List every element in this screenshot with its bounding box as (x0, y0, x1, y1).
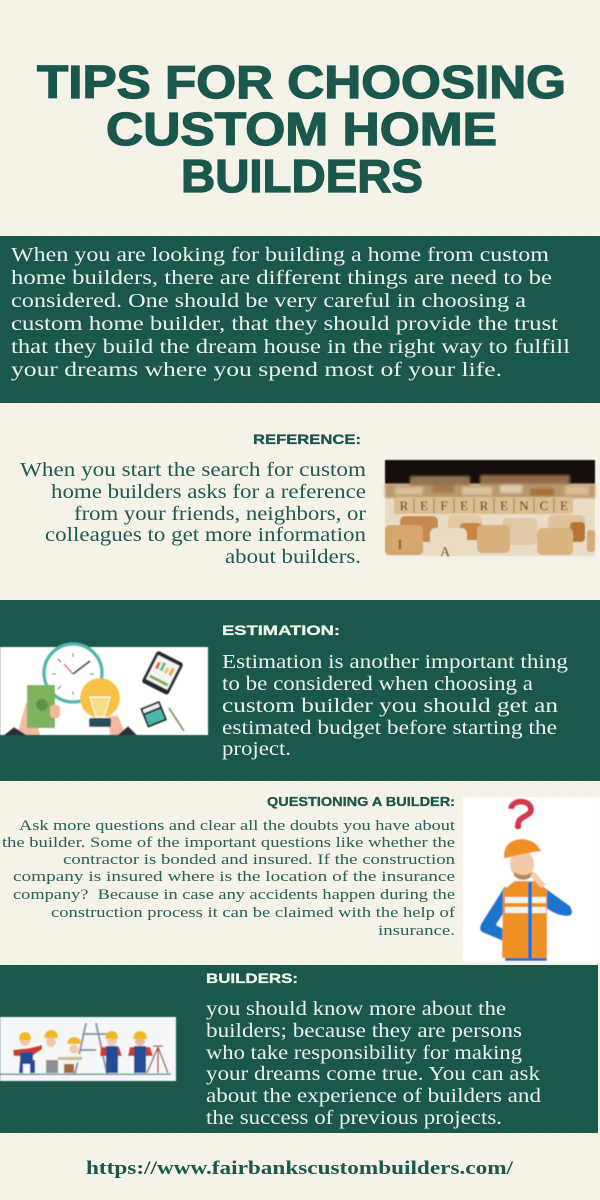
worker 2 (42, 1030, 60, 1073)
intro paragraph (11, 244, 570, 381)
icon: question mark (511, 802, 531, 824)
dice row: REFERENCE: R (400, 498, 409, 513)
intro paragraph: your dreams where you spend most of your life. (11, 359, 502, 381)
title (37, 56, 566, 202)
builders paragraph: you should know more about the (206, 998, 506, 1020)
image: team of builders (0, 1017, 176, 1081)
section: questioning a builder (2, 794, 600, 962)
worker 5 (128, 1031, 153, 1073)
estimation paragraph: Estimation is another important thing (222, 651, 568, 673)
questioning paragraph: contractor is bonded and insured. If the construction (63, 852, 456, 868)
reference paragraph: from your friends, neighbors, or (74, 504, 367, 525)
builders paragraph: about the experience of builders and (206, 1085, 541, 1107)
intro paragraph: home builders, there are different things are need to be (11, 267, 552, 289)
estimation paragraph: to be considered when choosing a (222, 673, 533, 695)
builders paragraph: who take responsibility for making (206, 1042, 522, 1064)
icon: money in hand (4, 685, 60, 735)
icon: red dot of question mark (514, 822, 522, 830)
icon: tablet chart (141, 650, 184, 696)
reference paragraph: When you start the search for custom (20, 460, 366, 481)
questioning paragraph: company is insured where is the location of the insurance (13, 869, 455, 885)
foreground dice: A (440, 545, 451, 560)
estimation paragraph: estimated budget before starting the (222, 717, 557, 739)
dice row: REFERENCE: C (540, 498, 548, 513)
estimation paragraph (222, 651, 568, 760)
builders paragraph: the success of previous projects. (206, 1107, 502, 1129)
dice row: REFERENCE: F (440, 498, 448, 513)
heading: questioning a builder: QUESTIONING A BUILDER: (267, 794, 455, 809)
panel: estimation (0, 600, 600, 781)
panel: introduction (0, 236, 600, 403)
heading: reference: REFERENCE: (253, 431, 361, 447)
dice row: REFERENCE: N (519, 498, 529, 513)
reference paragraph (20, 460, 367, 568)
questioning paragraph: company? Because in case any accidents happen during the (13, 887, 455, 903)
estimation paragraph: custom builder you should get an (222, 695, 558, 717)
worker figure (480, 839, 572, 961)
reference paragraph: home builders asks for a reference (51, 482, 366, 503)
worker 1 (13, 1032, 42, 1073)
intro paragraph: considered. One should be very careful in choosing a (11, 290, 526, 312)
reference paragraph: colleagues to get more information (45, 525, 366, 546)
image: reference letter dice (385, 460, 595, 560)
builders paragraph: builders; because they are persons (206, 1020, 522, 1042)
ground line (0, 1074, 171, 1075)
title: BUILDERS (181, 150, 423, 202)
heading: estimation: ESTIMATION: (222, 622, 340, 638)
dice row: REFERENCE: R (480, 498, 489, 513)
estimation paragraph: project. (222, 738, 291, 760)
builders paragraph (206, 998, 541, 1129)
questioning paragraph: the builder. Some of the important questions like whether the (2, 835, 455, 851)
dice row: REFERENCE (394, 497, 573, 514)
intro paragraph: custom home builder, that they should provide the trust (11, 313, 558, 335)
foreground dice (385, 515, 595, 560)
questioning paragraph: insurance. (378, 923, 455, 939)
intro paragraph: When you are looking for building a home from custom (11, 244, 549, 266)
questioning paragraph (2, 818, 456, 939)
questioning paragraph: Ask more questions and clear all the doubts you have about (19, 818, 455, 834)
panel: builders (0, 965, 598, 1133)
worker 4 (100, 1031, 122, 1073)
dice row: REFERENCE: E (460, 498, 468, 513)
image: budget illustration (0, 644, 208, 735)
dice row: REFERENCE: E (560, 498, 568, 513)
questioning paragraph: construction process it can be claimed with the help of (51, 905, 455, 921)
icon: pencil (169, 708, 184, 731)
reference paragraph: about builders. (225, 547, 361, 568)
title: CUSTOM HOME (106, 103, 497, 155)
dice row: REFERENCE: E (420, 498, 428, 513)
foreground dice: I (398, 538, 403, 553)
intro paragraph: that they build the dream house in the right way to fulfill (11, 336, 570, 358)
section: reference (20, 431, 595, 568)
icon: calculator (140, 701, 167, 728)
ladder (75, 1023, 107, 1074)
footer url: https://www.fairbankscustombuilders.com/ (86, 1158, 514, 1179)
builders paragraph: your dreams come true. You can ask (206, 1063, 540, 1085)
surveying tripod (147, 1046, 168, 1073)
dice row: REFERENCE: E (500, 498, 508, 513)
worker 3 (58, 1037, 84, 1073)
heading: builders: BUILDERS: (206, 970, 298, 986)
icon: clock (44, 644, 102, 702)
image: thinking worker (463, 797, 600, 962)
title: TIPS FOR CHOOSING (37, 56, 566, 108)
icon: light bulb in hand (80, 678, 137, 735)
